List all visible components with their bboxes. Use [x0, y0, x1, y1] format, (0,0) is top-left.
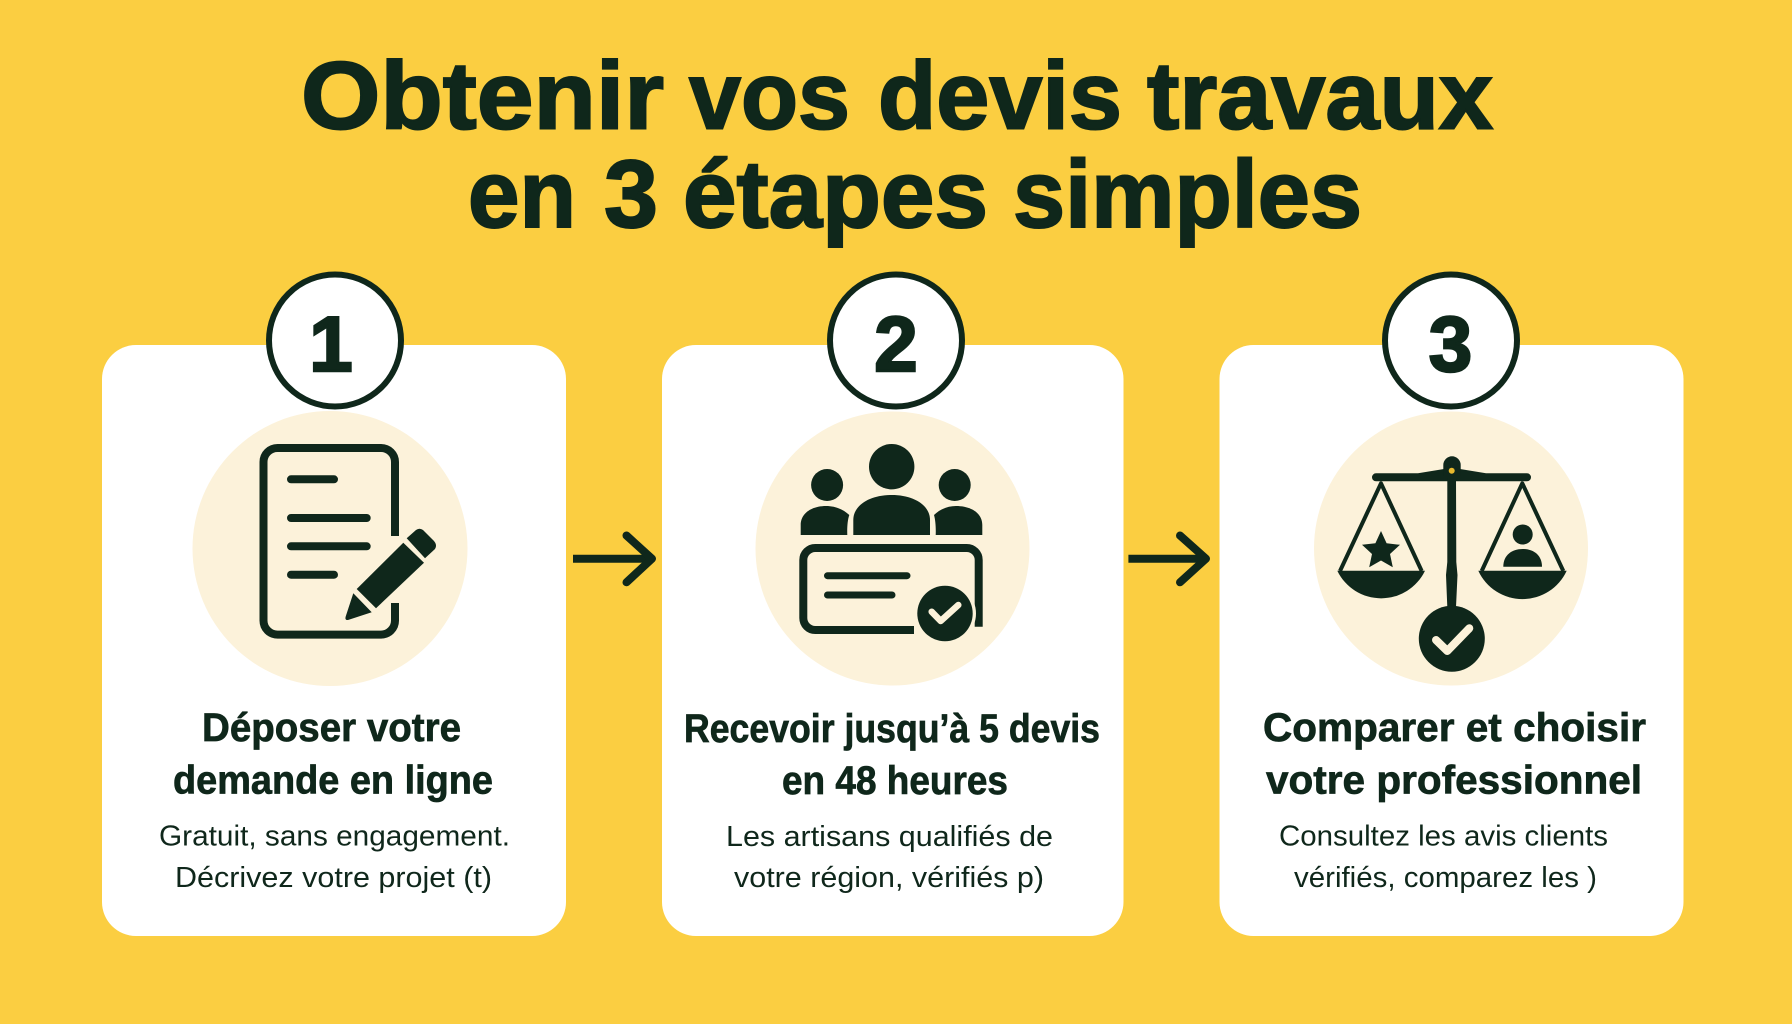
title: vos — [689, 43, 850, 150]
panel: step 1 — [102, 274, 566, 936]
step 3 heading: votre professionnel — [1266, 758, 1642, 802]
card background 1 — [102, 345, 566, 936]
title: étapes — [683, 141, 988, 248]
step 1 heading: Déposer votre — [202, 706, 461, 750]
number badge 1 — [269, 274, 401, 406]
step 2 description: votre région, vérifiés p) — [734, 862, 1044, 894]
title: Obtenir — [301, 43, 664, 150]
step 3 heading — [1263, 706, 1646, 802]
step 2 description: Les artisans qualifiés de — [726, 821, 1053, 853]
step 2 heading: Recevoir jusqu’à 5 devis — [684, 707, 1100, 751]
panel: step 2 — [662, 274, 1124, 936]
step 3 description — [1279, 821, 1608, 894]
title: travaux — [1147, 43, 1493, 150]
icon backdrop 3 — [1314, 412, 1588, 686]
icon: artisans and approved quote — [801, 444, 982, 644]
icon backdrop 1 — [192, 411, 468, 686]
card background 2 — [662, 345, 1124, 936]
title: devis — [878, 43, 1122, 150]
step 1 description: Décrivez votre projet (t) — [175, 862, 492, 894]
panel: step 3 — [1220, 274, 1684, 936]
step 3 heading: Comparer et choisir — [1263, 706, 1646, 750]
step 3 description: Consultez les avis clients — [1279, 821, 1608, 853]
icon: balance scale — [1337, 456, 1567, 672]
number badge 3: 3 — [1429, 300, 1472, 388]
number badge 2 — [830, 274, 962, 406]
title — [301, 43, 1493, 248]
card background 3 — [1220, 345, 1684, 936]
step 1 heading — [173, 706, 493, 802]
step 3 description: vérifiés, comparez les ) — [1294, 862, 1597, 894]
icon: document and pencil — [264, 448, 436, 635]
step 2 description — [726, 821, 1053, 894]
title: simples — [1013, 141, 1362, 248]
step 1 description — [159, 821, 510, 894]
step 1 heading: demande en ligne — [173, 758, 493, 802]
arrow 1 to 2 — [573, 536, 652, 582]
icon backdrop 2 — [756, 412, 1030, 686]
arrow 2 to 3 — [1128, 536, 1206, 582]
step 1 description: Gratuit, sans engagement. — [159, 821, 510, 853]
title: en — [468, 141, 576, 248]
step 2 heading — [684, 707, 1100, 803]
number badge 3 — [1385, 274, 1517, 406]
step 2 heading: en 48 heures — [782, 759, 1008, 803]
number badge 1: 1 — [309, 300, 353, 388]
number badge 2: 2 — [874, 300, 918, 388]
title: 3 — [604, 141, 658, 248]
